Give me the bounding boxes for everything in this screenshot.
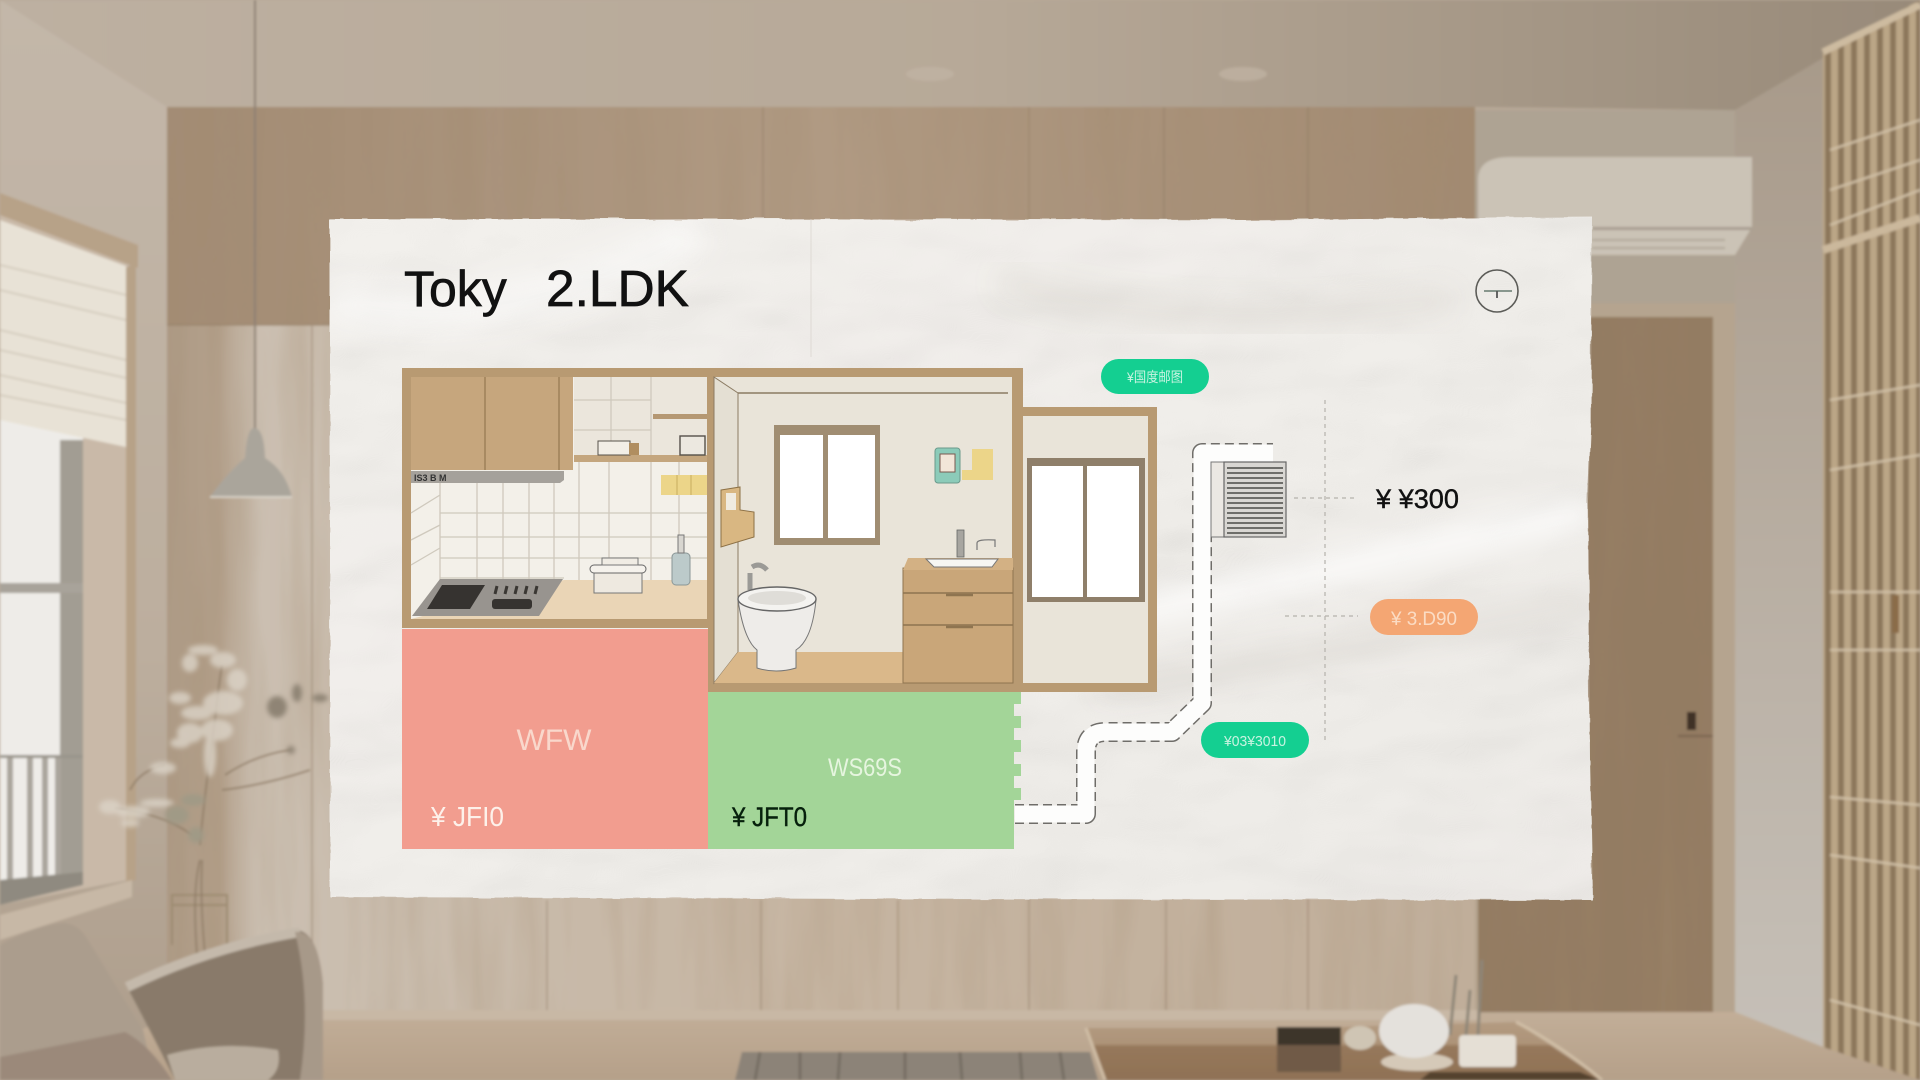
toilet [738,565,816,671]
dashed guide lines [1285,400,1358,742]
range hood: IS3 B M [414,473,447,483]
icon: compass circle [1476,270,1518,312]
red room block: ¥ JFI0 [430,801,504,832]
counter [411,580,707,619]
upper cabinets [411,377,573,470]
pill: orange price: ¥ 3.D90 [1390,609,1457,630]
pill: top green price: ¥国度邮图 [1126,369,1183,385]
duct pipe [1015,453,1273,814]
paper sheet panel [328,217,1594,901]
ceiling [0,0,1920,110]
floor plan [402,368,1157,849]
wood panel wall [167,107,1475,1010]
title: 2.LDK [546,260,689,317]
left wall [0,0,167,1080]
magazine holder [721,487,754,547]
bottle [672,535,690,585]
green room block [708,692,1021,849]
pill: top green price [1101,359,1209,394]
bathroom window [774,425,880,545]
floor [0,1012,1920,1080]
air conditioner [1478,157,1752,255]
range hood [411,471,564,483]
coffee table [1086,960,1602,1080]
pill: lower green price [1201,722,1309,758]
rug [735,1052,1098,1080]
kitchen [402,368,708,628]
vanity [903,530,1013,683]
soffit above the door [1475,110,1735,305]
green room block: ¥ JFT0 [731,802,807,832]
vent louver [1211,462,1286,537]
armchair [0,923,323,1080]
pendant lamp [210,0,292,497]
green room block: WS69S [828,754,902,782]
stove [412,579,563,616]
right white wall [1735,58,1823,1047]
right room window [1027,458,1145,602]
door with frame [1475,303,1735,1013]
title [404,260,689,317]
red room block [402,629,708,849]
window with blind [0,193,138,940]
pill: orange price [1370,599,1478,635]
toilet room [708,368,1023,692]
red room block: WFW [517,724,592,757]
pill: lower green price: ¥03¥3010 [1223,733,1286,750]
plant in vase [99,645,328,955]
pot [590,558,646,593]
price label: ¥ ¥300 [1375,484,1459,514]
wall panels teal and yellow [935,448,993,483]
shelves with items [574,414,707,495]
downlights [906,67,1267,81]
shoji screen [1823,0,1920,1080]
right room [1020,407,1157,692]
title: Toky [404,261,507,317]
